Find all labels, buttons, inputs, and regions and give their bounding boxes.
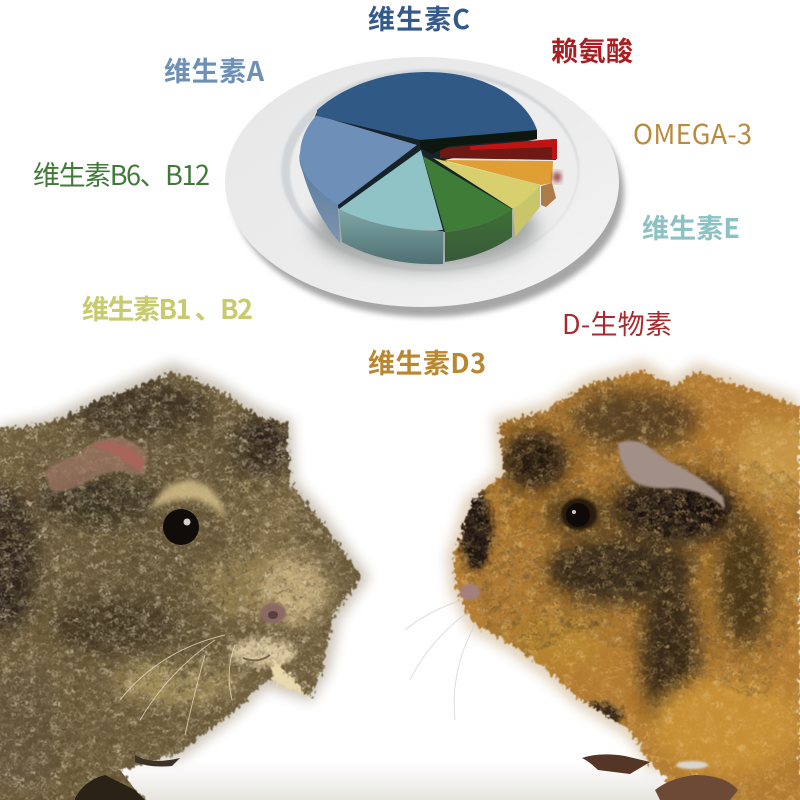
chest patch <box>676 761 708 769</box>
back paw <box>135 755 180 766</box>
fur streaks <box>0 396 288 680</box>
slice: vitamin C <box>317 72 537 154</box>
label: vitamin E: 维生素E <box>642 207 740 246</box>
front paw <box>75 775 145 800</box>
label: vitamin B6 B12: 维生素B6、B12 <box>33 154 210 193</box>
label: lysine: 赖氨酸 <box>551 30 633 69</box>
label: omega-3: OMEGA-3 <box>633 113 752 152</box>
front paw <box>582 754 650 774</box>
pie chart <box>299 72 561 264</box>
label: biotin: D-生物素 <box>562 303 672 342</box>
eye <box>163 509 199 545</box>
plate <box>225 57 624 317</box>
soft fur halo <box>446 360 800 770</box>
eye <box>561 498 597 530</box>
label: vitamin A: 维生素A <box>164 50 265 89</box>
illustration: right guinea pig <box>405 360 800 800</box>
ear <box>618 441 725 508</box>
bottom backing <box>680 775 800 800</box>
back paw <box>655 775 738 800</box>
label: vitamin D3: 维生素D3 <box>368 342 486 381</box>
fur streaks <box>456 376 704 657</box>
slice: vitamin E <box>339 150 443 264</box>
whiskers <box>120 635 235 735</box>
slice: vitamin A <box>299 115 417 243</box>
nose <box>243 603 286 660</box>
whiskers <box>405 600 475 720</box>
fur body <box>451 368 800 800</box>
label: vitamin B1 B2: 维生素B1 、B2 <box>82 288 253 327</box>
pie centre shadow <box>300 112 537 232</box>
eye surround <box>150 480 226 520</box>
soft fur halo <box>0 362 370 760</box>
bottom backing <box>0 770 143 800</box>
illustration: left guinea pig <box>0 360 404 800</box>
slice: lysine <box>440 139 561 182</box>
slice: vitamin B1 B2 <box>433 158 540 237</box>
slice: vitamin B6 B12 <box>423 156 512 262</box>
nose <box>460 584 480 600</box>
ear <box>45 437 147 492</box>
fur body <box>0 369 362 800</box>
slice: vitamin D3 <box>443 160 556 207</box>
